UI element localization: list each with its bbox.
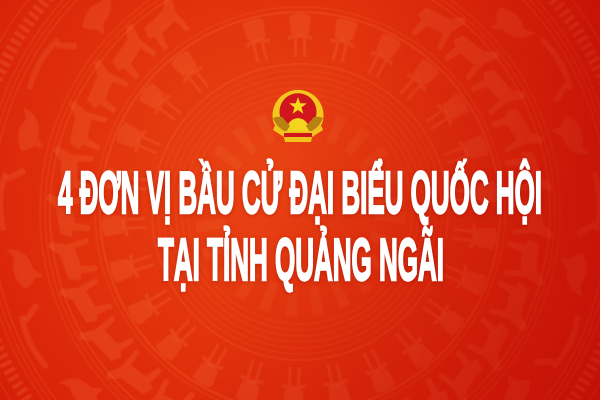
- emblem outer ring: [273, 90, 324, 132]
- human figure band: [101, 14, 499, 400]
- emblem ribbon band: [284, 133, 312, 137]
- icon: national emblem: [273, 90, 324, 142]
- emblem ribbon: [273, 125, 323, 142]
- emblem gear: [286, 118, 310, 131]
- emblem red field: [280, 93, 316, 124]
- emblem wheat left: [273, 117, 290, 132]
- emblem wheat right: [306, 117, 323, 132]
- title: [58, 159, 542, 293]
- emblem star: [289, 97, 307, 114]
- inner radial ring: [210, 122, 390, 302]
